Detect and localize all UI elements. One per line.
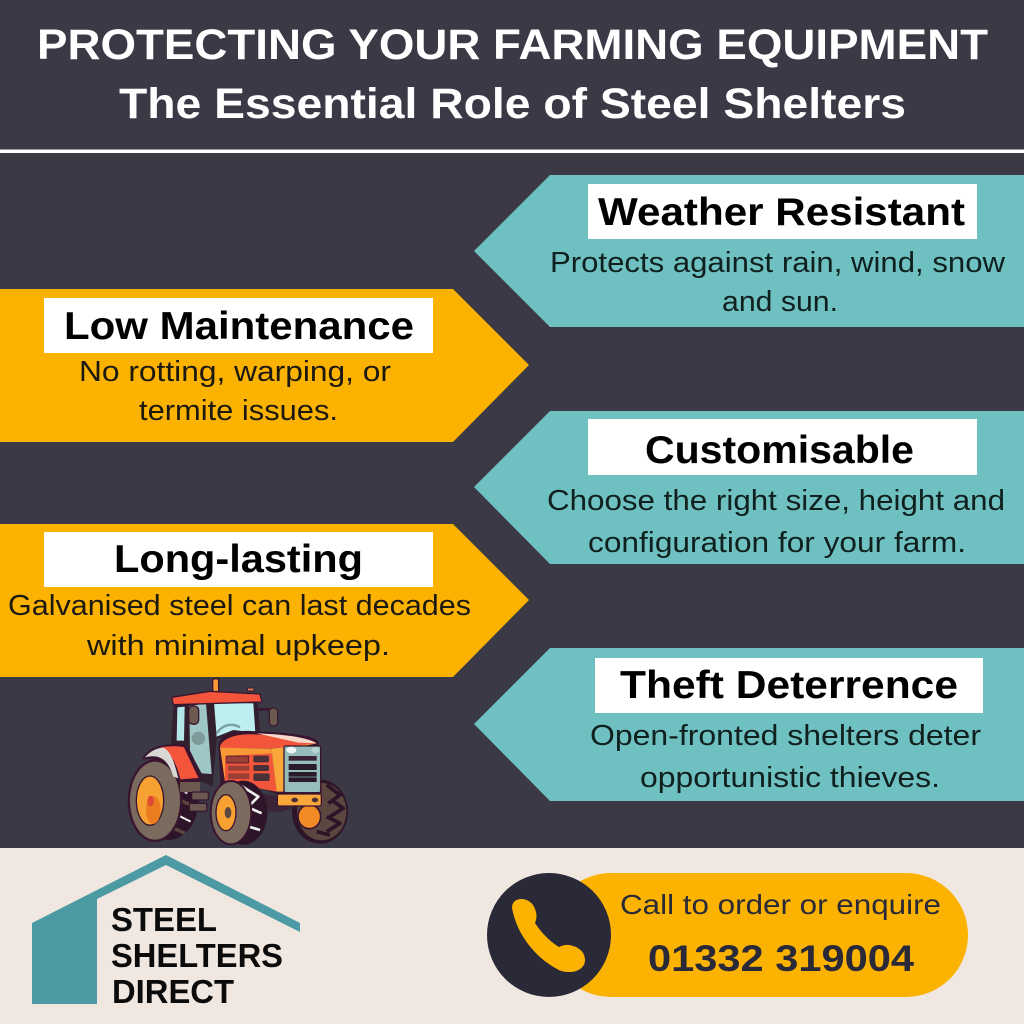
panel: theft deterrence — [474, 648, 1024, 801]
big rear wheel — [128, 759, 198, 842]
title — [37, 21, 988, 128]
cab — [171, 688, 278, 787]
logo wordmark: SHELTERS — [111, 937, 283, 974]
title: The Essential Role of Steel Shelters — [119, 80, 906, 128]
panel: low maintenance: Low Maintenance — [64, 305, 414, 348]
call text: Call to order or enquire — [620, 889, 941, 920]
hood and grille — [218, 731, 322, 813]
logo shelter mark — [32, 855, 300, 1004]
logo: steel shelters direct — [32, 855, 300, 1010]
panel: low maintenance: No rotting, warping, or — [79, 356, 391, 388]
fender — [142, 744, 208, 811]
front wheel — [210, 780, 267, 845]
exhaust — [213, 679, 219, 692]
footer background — [0, 848, 1024, 1024]
panel: long-lasting: with minimal upkeep. — [86, 630, 390, 662]
panel: long-lasting — [0, 524, 529, 677]
panel: weather resistant: Protects against rain, wind, snow — [550, 247, 1006, 279]
panel: weather resistant — [474, 175, 1024, 327]
panel: long-lasting: Galvanised steel can last decades — [8, 590, 471, 622]
icon: phone — [487, 873, 611, 997]
panel: customisable: Choose the right size, height and — [547, 485, 1005, 517]
panel: weather resistant: and sun. — [722, 286, 838, 318]
panel: customisable: configuration for your farm. — [588, 527, 966, 559]
logo wordmark: STEEL — [111, 901, 217, 938]
icon: tractor — [128, 679, 348, 845]
logo wordmark: DIRECT — [112, 973, 234, 1010]
panel: theft deterrence: Open-fronted shelters deter — [590, 720, 981, 752]
far rear wheel — [292, 780, 348, 844]
panel: long-lasting: Long-lasting — [114, 538, 363, 581]
panel: customisable — [474, 411, 1024, 564]
logo wordmark — [111, 901, 283, 1010]
title: PROTECTING YOUR FARMING EQUIPMENT — [37, 21, 988, 69]
panel: weather resistant: Weather Resistant — [598, 191, 965, 234]
panel: customisable: Customisable — [645, 429, 914, 472]
panel: low maintenance — [0, 289, 529, 442]
call to action pill — [487, 873, 968, 997]
panel: theft deterrence: opportunistic thieves. — [640, 762, 940, 794]
panel: low maintenance: termite issues. — [139, 395, 338, 427]
phone number: 01332 319004 — [648, 938, 914, 979]
panel: theft deterrence: Theft Deterrence — [620, 664, 958, 707]
